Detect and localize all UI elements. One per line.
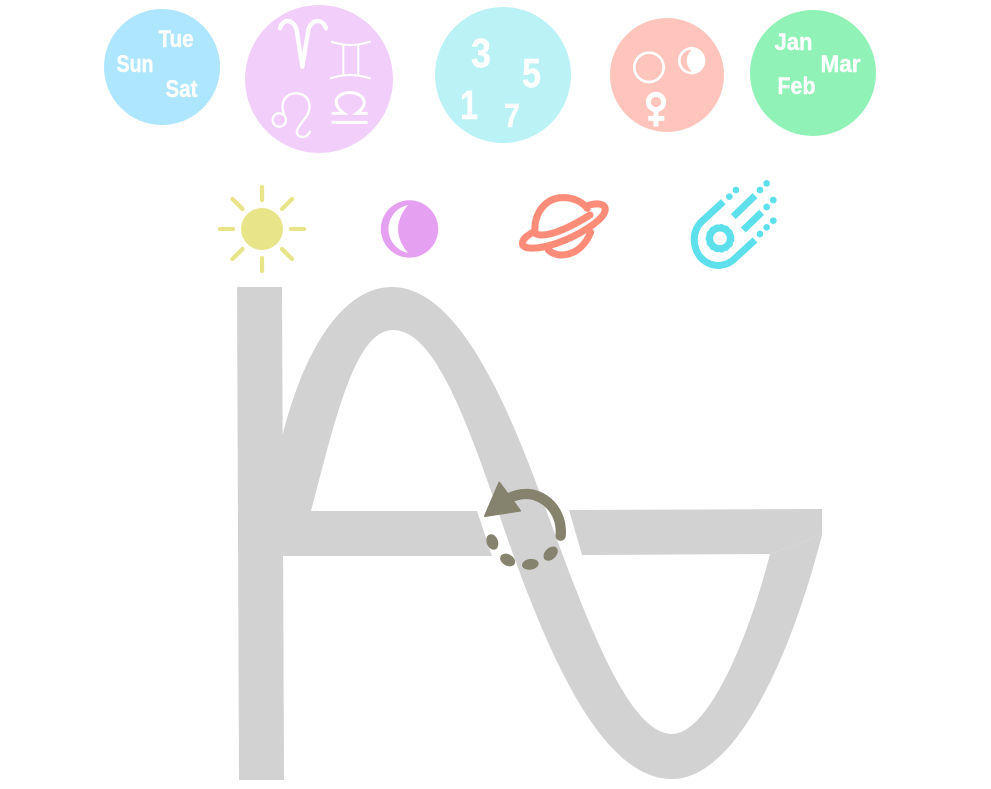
circle: days of week — [104, 9, 220, 125]
circle: months: Jan — [774, 29, 812, 56]
glyph: horizontal bar right — [569, 509, 822, 555]
circle: months: Mar — [820, 51, 860, 78]
circle: numbers — [435, 7, 571, 143]
circle: months: Feb — [778, 73, 816, 100]
glyph: vertical stem — [237, 287, 284, 780]
icon: aries — [280, 21, 326, 67]
circle: days of week: Sun — [116, 51, 154, 78]
icon: libra — [332, 93, 368, 122]
icon: leo — [273, 93, 310, 137]
icon: planet — [522, 198, 605, 255]
icon: gemini — [331, 42, 370, 78]
circle: numbers: 1 — [460, 82, 478, 128]
circle: days of week: Sat — [166, 76, 198, 103]
circle: months — [750, 10, 876, 136]
circle: days of week: Tue — [158, 26, 194, 53]
glyph: sine curve ribbon — [282, 287, 822, 779]
icon: sun symbol — [634, 53, 664, 82]
icon: comet — [694, 180, 777, 265]
planetary symbol: gray glyph — [237, 287, 822, 780]
icon: retrograde arrow — [484, 483, 561, 571]
icon: moon symbol — [678, 47, 705, 74]
circle: numbers: 5 — [522, 50, 541, 96]
circle: numbers: 7 — [504, 97, 520, 134]
icon: venus symbol — [648, 94, 664, 127]
circle: zodiac signs — [245, 5, 393, 153]
circle: celestial symbols — [610, 18, 724, 132]
glyph: horizontal bar left — [280, 511, 492, 556]
icon: moon — [381, 200, 438, 258]
icon: sun — [220, 187, 304, 271]
circle: numbers: 3 — [471, 30, 491, 76]
